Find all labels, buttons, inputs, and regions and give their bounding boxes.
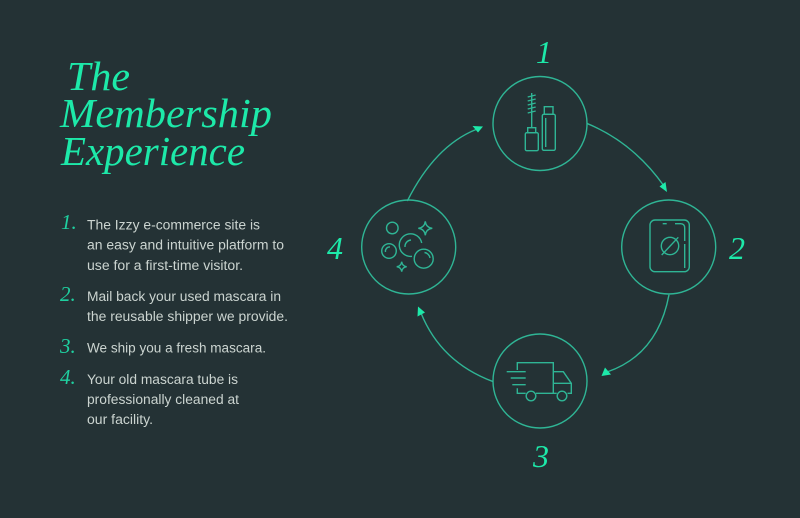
step 4 text: 4. — [60, 365, 76, 389]
step 2 text: 2. — [60, 282, 76, 306]
step 3 text: We ship you a fresh mascara. — [87, 340, 266, 356]
title: The — [67, 53, 130, 99]
title — [59, 53, 272, 174]
number 3: 3 — [532, 438, 549, 474]
step 1 text: 1. — [61, 210, 77, 234]
arrow from step 1 to step 2 — [587, 123, 667, 192]
number 4: 4 — [327, 230, 343, 266]
step 4 text: our facility. — [87, 412, 153, 427]
step 1 circle with mascara icon — [493, 76, 587, 170]
step 1 text: The Izzy e-commerce site is — [87, 218, 260, 232]
number 1: 1 — [536, 34, 552, 70]
step 2 text — [60, 282, 288, 324]
step 3 text: 3. — [59, 334, 76, 358]
step 2 text: Mail back your used mascara in — [87, 289, 281, 304]
step 2 text: the reusable shipper we provide. — [87, 309, 288, 324]
steps list — [59, 210, 288, 427]
step 2 circle with package icon — [622, 200, 716, 294]
step 4 text — [60, 365, 239, 427]
step 3 circle with truck icon — [493, 334, 587, 428]
arrow from step 2 to step 3 — [602, 295, 669, 376]
step 1 text: use for a first-time visitor. — [87, 258, 243, 273]
step 1 text: an easy and intuitive platform to — [87, 238, 284, 252]
step 4 circle with bubbles icon — [362, 200, 456, 294]
step 4 text: professionally cleaned at — [87, 392, 239, 407]
number 2: 2 — [729, 230, 745, 266]
step 3 text — [59, 334, 266, 358]
step 4 text: Your old mascara tube is — [87, 372, 238, 387]
step 1 text — [61, 210, 284, 273]
title: Membership — [59, 90, 272, 136]
arrow from step 4 to step 1 — [407, 126, 483, 201]
title: Experience — [60, 128, 245, 174]
arrow from step 3 to step 4 — [418, 306, 493, 382]
